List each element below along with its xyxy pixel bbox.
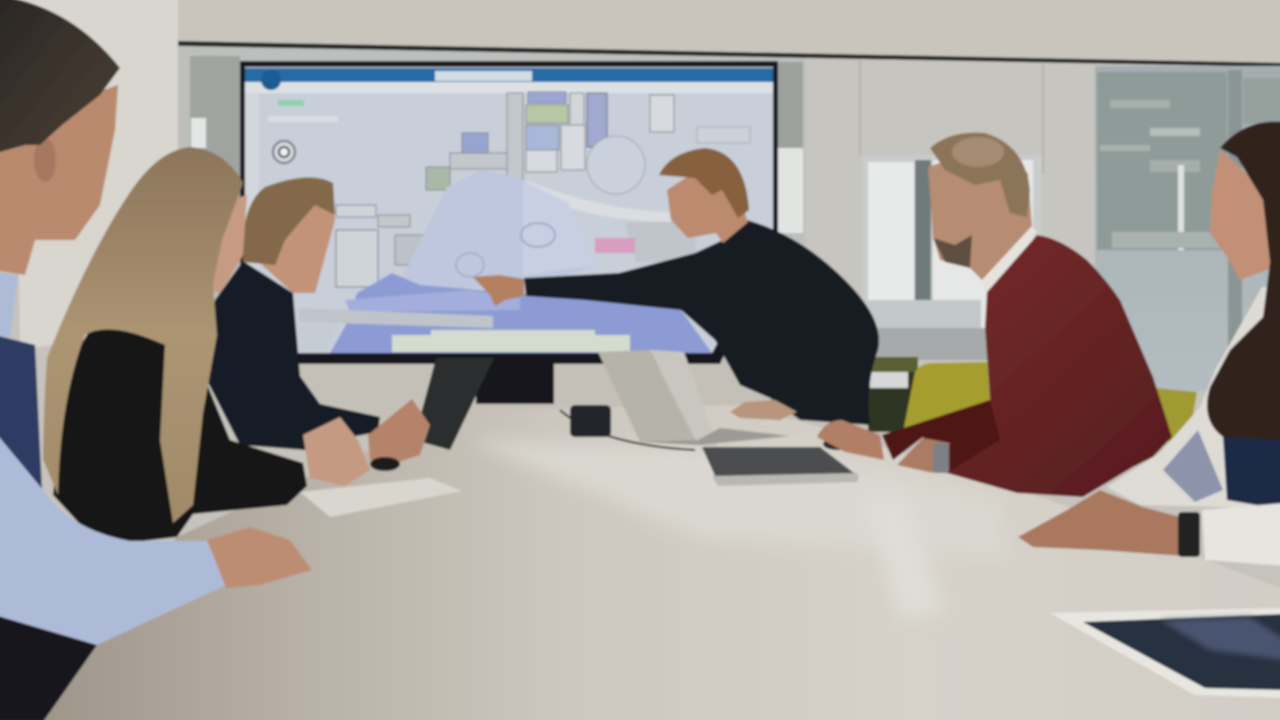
sweater <box>882 235 1172 497</box>
long hair <box>43 147 243 523</box>
cuff <box>1202 503 1280 566</box>
sweater pattern <box>1163 430 1223 502</box>
shirt collar <box>982 225 1037 294</box>
hair <box>1207 122 1280 440</box>
table reflections <box>470 440 1010 620</box>
shirt collar <box>0 272 18 338</box>
dark laptop left <box>414 358 494 450</box>
shirt sleeve <box>0 432 226 645</box>
face <box>210 195 247 293</box>
presenter <box>473 148 879 425</box>
sweater white <box>1107 287 1280 510</box>
floor plan content <box>245 67 773 353</box>
man in dark navy sweater <box>200 177 430 486</box>
vest <box>0 335 42 490</box>
puck speaker <box>570 405 611 437</box>
display screen <box>240 61 778 404</box>
hair <box>659 148 749 218</box>
building blueprint blocks <box>336 92 750 287</box>
head and neck <box>928 150 1032 280</box>
second hand and watch <box>897 438 950 473</box>
beard <box>933 235 972 268</box>
hand on mouse <box>817 420 884 460</box>
body <box>53 320 307 546</box>
glass partition right <box>1095 66 1280 391</box>
resting hand <box>730 400 797 420</box>
blonde woman <box>43 147 307 546</box>
torso and arm <box>524 220 879 425</box>
window <box>862 155 1042 360</box>
man in red sweater <box>817 133 1172 497</box>
face and neck <box>667 175 748 243</box>
face <box>1210 150 1272 280</box>
hair <box>0 0 120 155</box>
hands <box>368 399 430 463</box>
blue base <box>330 273 712 353</box>
notebook on table <box>300 478 462 517</box>
left white column <box>15 0 178 350</box>
hand <box>207 527 312 588</box>
hand <box>1018 490 1197 557</box>
sweater arm shadow <box>882 400 1000 473</box>
sweater navy <box>1223 420 1280 510</box>
woman on right <box>1018 122 1280 566</box>
face and neck <box>0 85 118 275</box>
head <box>247 195 335 293</box>
pointing hand <box>473 275 524 306</box>
dark lower body <box>0 612 97 720</box>
tablet on table <box>1050 608 1280 698</box>
hair <box>243 177 335 265</box>
rear laptop with cable <box>560 350 790 450</box>
table <box>40 405 1280 720</box>
hair <box>930 133 1030 217</box>
yellow chairs <box>868 357 1197 442</box>
mound <box>402 170 597 290</box>
man in foreground <box>0 0 312 720</box>
ear <box>34 138 56 182</box>
front laptop <box>702 438 858 486</box>
